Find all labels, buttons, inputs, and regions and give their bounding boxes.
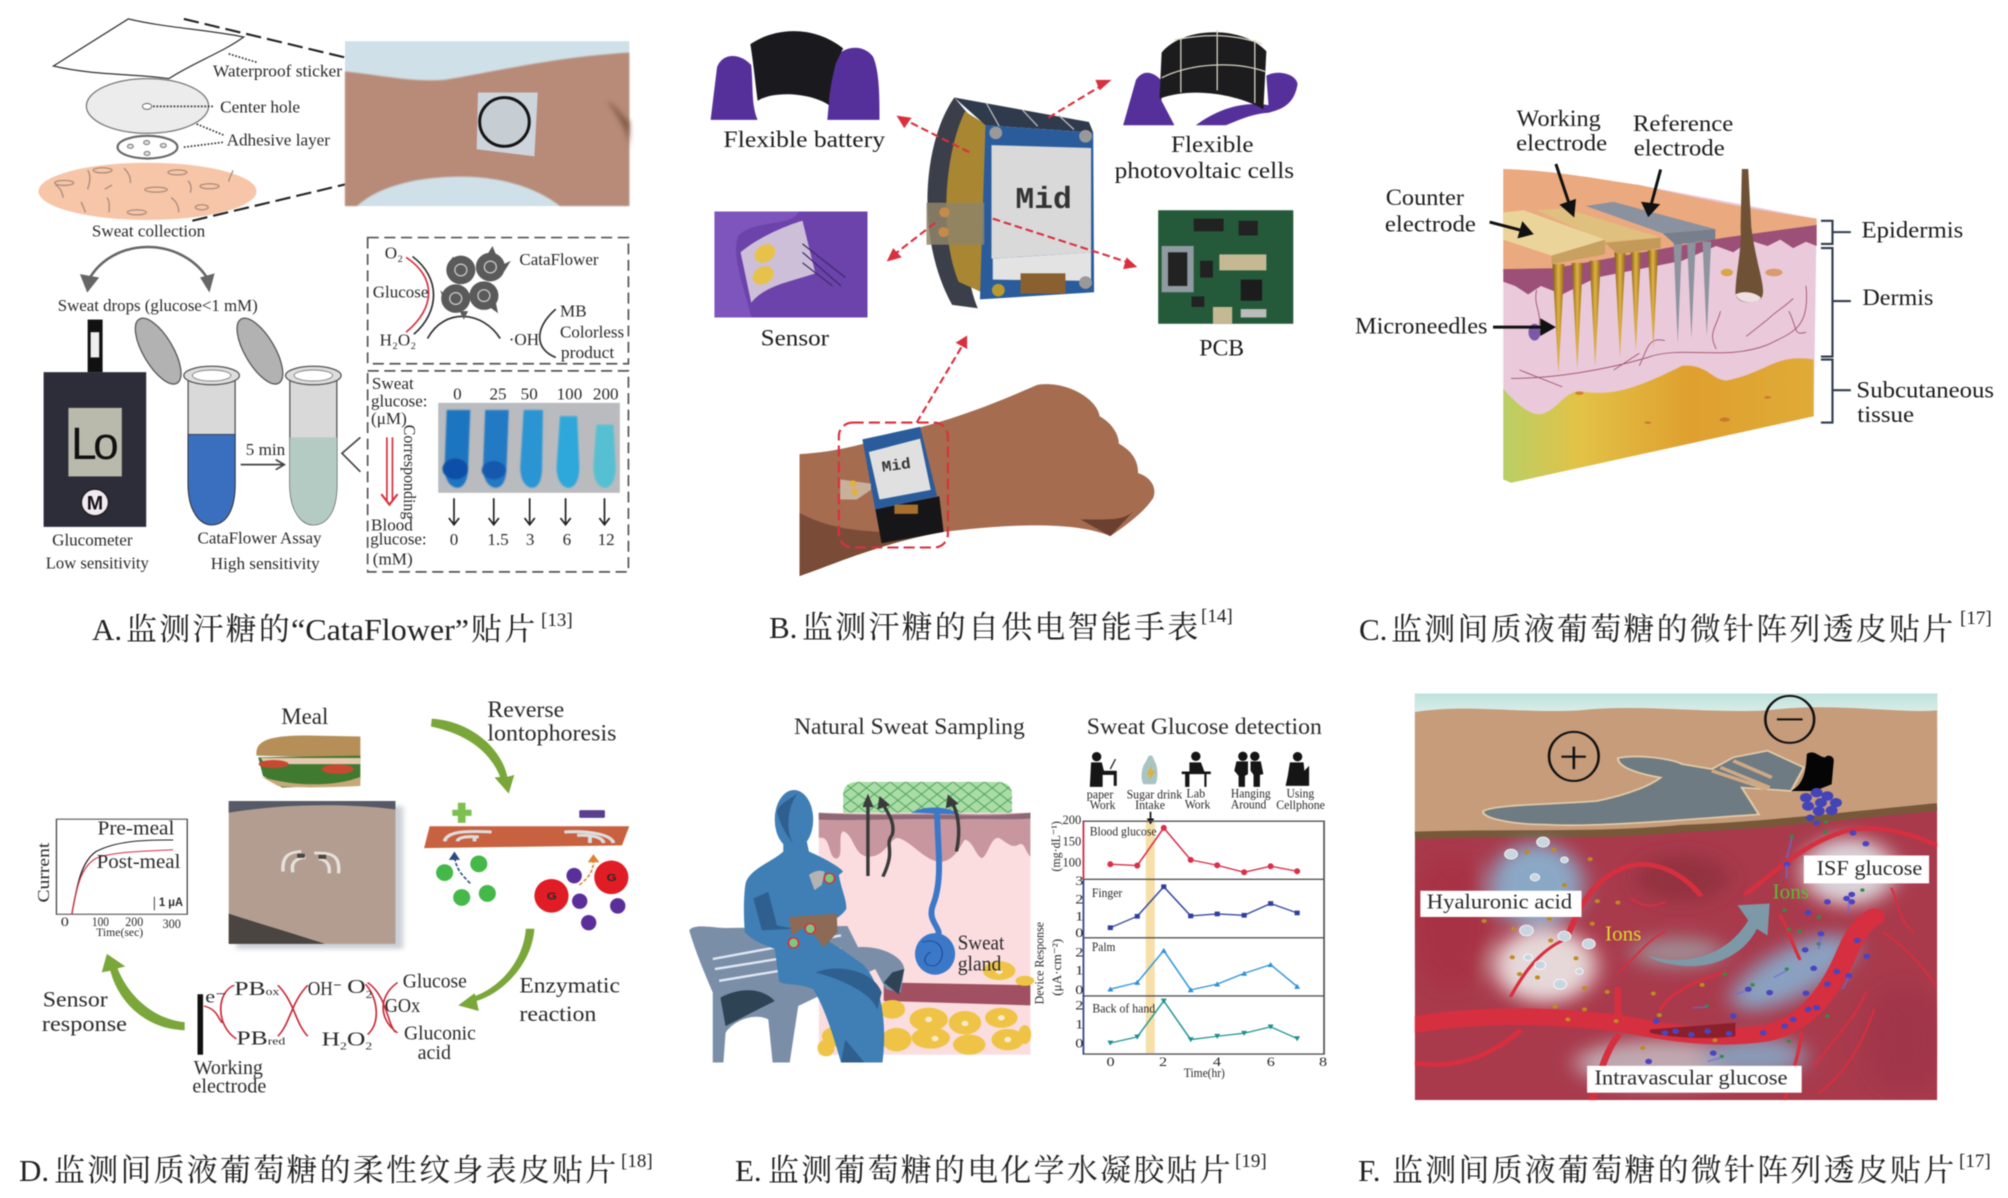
chart: current: 200 (125, 916, 143, 930)
dashed leader lines (184, 19, 500, 221)
line charts: glucose and device response: 1 (1075, 1018, 1083, 1032)
line charts: glucose and device response: (μA·cm⁻²) (1051, 939, 1064, 996)
panel A: CataFlower patch (38, 19, 629, 573)
labels: panel F: Intravascular glucose (1594, 1066, 1788, 1090)
watch device: Mid (1015, 184, 1072, 218)
box: colour result: 0 (453, 385, 462, 403)
caption C: 监测间质液葡萄糖的微针阵列透皮贴片 (1391, 612, 1955, 647)
hair follicle (1721, 169, 1782, 302)
labels: panel B: Flexible battery (723, 127, 885, 153)
photo: PCB (1158, 210, 1293, 324)
line charts: glucose and device response: (mg·dL⁻¹) (1050, 821, 1063, 872)
labels: panel E (794, 713, 1322, 976)
labels: panel C: electrode (1516, 131, 1607, 156)
line charts: glucose and device response: Back of hand (1092, 1002, 1155, 1015)
reaction scheme: PBred (236, 1026, 285, 1049)
iontophoresis strip (424, 803, 629, 930)
line charts: glucose and device response: 2 (1075, 893, 1083, 907)
box: colour result: Blood (371, 516, 413, 535)
icon labels: Sugar drink (1127, 788, 1183, 802)
chart: current: Pre-meal (97, 816, 174, 839)
reaction scheme: Glucose (403, 969, 467, 992)
labels: panel D: Sensor (43, 987, 108, 1012)
labels: panel C: Microneedles (1355, 314, 1487, 339)
panel D: tattoo epidermal patch (35, 696, 629, 1097)
caption A (92, 610, 573, 647)
reaction scheme: Gluconic (404, 1021, 476, 1044)
icon labels: Cellphone (1276, 799, 1325, 813)
labels: panel C: Working (1517, 106, 1601, 132)
labels: panel B: photovoltaic cells (1115, 158, 1294, 184)
labels: panel C: Epidermis (1862, 218, 1963, 244)
line charts: glucose and device response: 3 (1075, 875, 1083, 889)
labels: panel D: response (42, 1012, 127, 1036)
green cycle arrows (102, 719, 534, 1030)
labels: panel A: Adhesive layer (227, 131, 330, 149)
arrows (1490, 164, 1661, 333)
caption F: F. (1358, 1153, 1381, 1188)
icon labels: paper (1087, 788, 1113, 802)
reaction scheme: 2 (340, 1040, 347, 1052)
blood vessels (1415, 828, 1936, 1100)
labels: panel E: Natural Sweat Sampling (794, 713, 1025, 739)
sweat gland (912, 807, 961, 975)
skin illustration background (1413, 694, 1943, 1100)
line charts: glucose and device response: 6 (1267, 1055, 1275, 1069)
photo: sensor on glove (714, 212, 868, 317)
particles: hyaluronic acid and ions (1482, 837, 1717, 1050)
line charts: glucose and device response: 0 (1075, 927, 1083, 941)
reaction scheme: O (347, 975, 366, 998)
chart: current: Time(sec) (96, 926, 143, 939)
reaction scheme: Working (194, 1056, 263, 1079)
caption B: [14] (1201, 606, 1233, 627)
labels: panel C: Reference (1633, 111, 1733, 137)
icon labels: Intake (1135, 799, 1165, 813)
labels: panel F: Ions (1773, 880, 1809, 904)
photo: patch on arm (345, 41, 629, 206)
box: CataFlower reaction: H₂O₂ (380, 331, 416, 350)
labels: panel E: Sweat (958, 931, 1004, 955)
labels: panel A: 5 min (246, 440, 286, 459)
line charts: glucose and device response: 2 (1075, 946, 1083, 960)
labels: panel A: CataFlower Assay (198, 528, 322, 547)
icon: pale tube (228, 312, 341, 525)
icon labels: Using (1286, 787, 1315, 801)
line charts: glucose and device response: Time(hr) (1184, 1067, 1225, 1081)
caption E: [19] (1235, 1151, 1267, 1172)
icon: blue tube (126, 312, 239, 525)
arrowheads (887, 80, 1137, 349)
line charts: glucose and device response: 0 (1106, 1055, 1115, 1069)
labels: panel F (1420, 855, 1929, 1093)
labels: panel A: Sweat collection (92, 221, 206, 240)
icon labels: Work (1185, 798, 1211, 812)
labels: panel A: Low sensitivity (46, 554, 149, 572)
box: CataFlower reaction: ·OH (509, 330, 539, 349)
electrode contact and glucose cluster (1791, 752, 1842, 821)
labels: panel D: Meal (281, 703, 328, 729)
icon: glucometer (44, 320, 146, 527)
icon labels: Lab (1186, 787, 1205, 801)
line charts: glucose and device response: 100 (1062, 856, 1081, 870)
box: CataFlower reaction: MB (560, 302, 587, 321)
box: CataFlower reaction: CataFlower (519, 250, 599, 269)
chart: current: 100 (92, 916, 109, 930)
brackets (1821, 221, 1851, 423)
box: colour result: 1.5 (487, 530, 509, 549)
labels: panel E: Sweat Glucose detection (1087, 713, 1322, 739)
icon: glucometer: M (87, 493, 103, 515)
labels: panel C: Dermis (1862, 285, 1933, 311)
reaction scheme: electrode (192, 1074, 266, 1097)
photo: watch on wrist: Mid (881, 455, 912, 477)
line charts: glucose and device response: 0 (1075, 984, 1083, 998)
box: CataFlower reaction: product (561, 343, 615, 362)
icon labels: Hanging (1231, 787, 1271, 801)
box: colour result: 12 (598, 530, 615, 549)
labels: panel B: Sensor (761, 326, 829, 352)
caption A: 贴片 (471, 612, 537, 647)
caption B: B. (769, 610, 797, 645)
polarity symbols (1549, 696, 1814, 781)
line charts: glucose and device response: 150 (1062, 835, 1081, 849)
labels: panel A: Glucometer (52, 531, 133, 549)
labels: panel C: electrode (1634, 136, 1725, 162)
labels: panel B: PCB (1199, 335, 1244, 361)
line charts: glucose and device response: 2 (1075, 999, 1083, 1013)
box: colour result: 3 (526, 530, 534, 549)
reaction scheme (192, 969, 476, 1097)
caption D: 监测间质液葡萄糖的柔性纹身表皮贴片 (54, 1153, 618, 1188)
caption F: 监测间质液葡萄糖的微针阵列透皮贴片 (1392, 1153, 1956, 1188)
iontophoresis strip: G (547, 892, 557, 902)
labels: panel B (723, 127, 1294, 361)
labels: panel E: gland (958, 952, 1001, 976)
box: CataFlower reaction (368, 238, 628, 364)
photo: sandwich (256, 736, 360, 788)
box: colour result: glucose: (371, 392, 428, 411)
skin cross section (1503, 169, 1817, 483)
reaction scheme: 2 (365, 1040, 372, 1052)
dark cut in vessel (1650, 1023, 1735, 1038)
labels: panel C: Counter (1386, 185, 1464, 211)
box: colour result: 0 (450, 530, 458, 549)
caption C: [17] (1960, 608, 1992, 629)
panel F: interstitial glucose illustration (1413, 694, 1943, 1100)
caption A: [13] (541, 610, 573, 631)
labels: panel F: Hyaluronic acid (1427, 890, 1572, 914)
box: CataFlower reaction: Glucose (373, 283, 428, 302)
panel C: microneedle array (1355, 106, 1994, 483)
reaction scheme: GOx (385, 994, 421, 1016)
activity icons (1090, 752, 1309, 787)
photo: watch on wrist (800, 384, 1154, 576)
box: CataFlower reaction: Colorless (560, 323, 624, 342)
box: CataFlower reaction: O₂ (385, 244, 403, 263)
box: colour result: Sweat (372, 374, 414, 393)
chart: current: 0 (61, 916, 69, 930)
reaction scheme: acid (418, 1041, 451, 1063)
electrodes and microneedles (1503, 202, 1715, 374)
box: colour result: 25 (489, 385, 507, 403)
labels: panel D (42, 696, 620, 1036)
line charts: glucose and device response: 200 (1062, 813, 1081, 827)
box: colour result: 6 (563, 530, 571, 549)
labels: panel A: Waterproof sticker (213, 62, 342, 80)
labels: panel C: tissue (1857, 402, 1914, 428)
caption D: [18] (621, 1151, 653, 1172)
line charts: glucose and device response: Device Response (1034, 922, 1047, 1004)
box: colour result: (μM) (371, 409, 407, 428)
labels: panel C (1355, 106, 1994, 428)
labels: panel A: Sweat drops (glucose<1 mM) (58, 296, 258, 315)
panel E: electrochemical hydrogel patch (689, 713, 1327, 1081)
box: colour result: 50 (521, 385, 538, 403)
chart: current: Current (35, 842, 54, 903)
caption D: D. (19, 1153, 49, 1188)
icon labels: Around (1231, 798, 1267, 812)
caption E: E. (735, 1153, 762, 1188)
labels: panel B: Flexible (1171, 132, 1254, 158)
line charts: glucose and device response: 4 (1213, 1055, 1222, 1069)
line charts: glucose and device response: Palm (1092, 941, 1116, 954)
labels: panel C: Subcutaneous (1856, 378, 1994, 403)
labels: panel A: Center hole (220, 98, 300, 117)
line charts: glucose and device response: 2 (1159, 1055, 1167, 1069)
caption E: 监测葡萄糖的电化学水凝胶贴片 (768, 1153, 1233, 1188)
particles: glucose and ions (1645, 820, 1870, 1064)
box: colour result (368, 371, 628, 572)
reaction scheme: e⁻ (205, 988, 227, 1007)
flexible tattoo electrode (1483, 751, 1804, 825)
panel B: self-powered smart watch (711, 30, 1298, 576)
line charts: glucose and device response: 1 (1075, 964, 1083, 978)
labels: panel A (46, 62, 342, 573)
seated figure (744, 790, 884, 1062)
labels: panel D: lontophoresis (487, 720, 616, 746)
labels: panel F: Ions (1605, 922, 1641, 946)
icon: exploded patch layers (38, 19, 256, 220)
box: colour result: 100 (557, 385, 582, 403)
line charts: glucose and device response: 1 (1075, 910, 1083, 924)
reaction scheme: O (347, 1027, 365, 1050)
caption A: A. (92, 612, 122, 647)
chart: current: Post-meal (97, 850, 180, 873)
icon labels (1087, 787, 1325, 813)
skin block (817, 782, 1034, 1056)
chart: current: 1 μA (159, 895, 183, 908)
labels: panel F: ISF glucose (1817, 857, 1922, 880)
chart: current: 300 (162, 918, 181, 932)
curved arrow pair (80, 247, 215, 293)
line charts: glucose and device response (1034, 812, 1327, 1081)
icon labels: Work (1090, 799, 1116, 813)
bench (689, 926, 904, 1062)
reaction scheme: 2 (366, 988, 372, 1001)
photo: flexible photovoltaic cells (1123, 30, 1298, 125)
line charts: glucose and device response: Finger (1092, 886, 1123, 899)
box: colour result: glucose: (370, 530, 427, 549)
labels: panel A: High sensitivity (211, 554, 320, 573)
photo: tattoo on arm (229, 801, 403, 949)
line charts: glucose and device response: 0 (1075, 1037, 1083, 1051)
iontophoresis strip: G (607, 873, 617, 884)
blue-grey flow arrow (1648, 904, 1770, 966)
caption F: [17] (1959, 1151, 1991, 1172)
reaction scheme: H (321, 1027, 340, 1050)
line charts: glucose and device response: Blood glucose (1090, 825, 1156, 838)
icon: glucometer: Lo (71, 419, 119, 469)
watch device (926, 98, 1094, 308)
labels: panel D: Enzymatic (519, 973, 620, 998)
line charts: glucose and device response: 8 (1319, 1055, 1327, 1069)
box: colour result: Corresponding (400, 425, 419, 520)
caption C: C. (1359, 612, 1387, 647)
caption A: “CataFlower” (291, 612, 469, 647)
box: colour result: (mM) (373, 550, 413, 569)
reaction scheme: PBox (234, 977, 279, 1000)
photo: flexible battery (711, 31, 879, 120)
arrow: 5 min (241, 437, 360, 472)
labels: panel D: reaction (519, 1002, 597, 1026)
box: colour result: 200 (593, 385, 619, 403)
reaction scheme: OH⁻ (308, 977, 342, 1000)
chart: current (35, 816, 187, 939)
caption B: 监测汗糖的自供电智能手表 (802, 610, 1200, 645)
labels: panel C: electrode (1385, 211, 1476, 237)
red dashed arrows (894, 84, 1130, 423)
black arrows (862, 794, 959, 877)
caption A: 监测汗糖的 (126, 612, 292, 647)
labels: panel D: Reverse (487, 696, 564, 722)
